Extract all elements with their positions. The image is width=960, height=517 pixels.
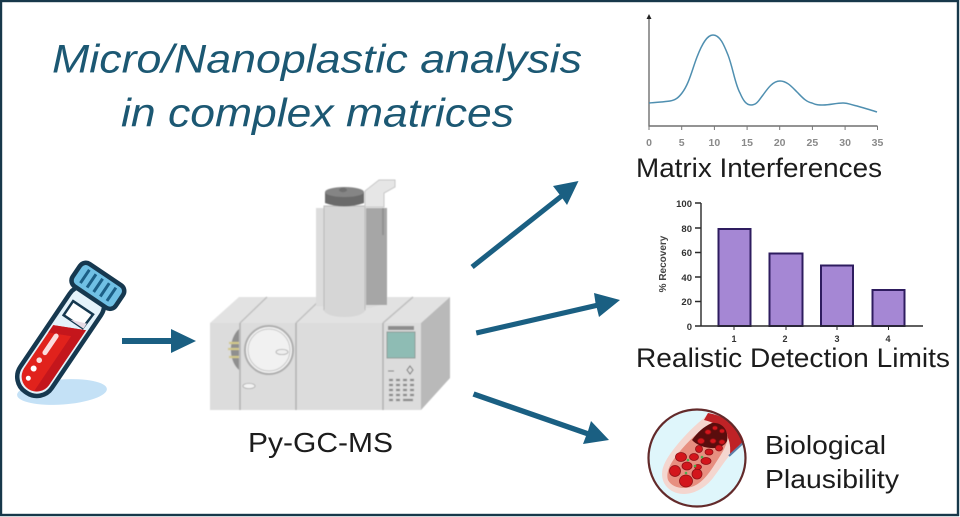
title: in complex matrices <box>121 92 514 136</box>
bar chart axes <box>695 203 923 326</box>
chart x tick labels: 5 <box>679 137 685 149</box>
label: Matrix Interferences: Matrix Interferences <box>636 153 882 183</box>
title <box>52 38 582 136</box>
icon: blood vessel <box>648 410 746 506</box>
label: Biological Plausibility: Biological <box>765 430 886 460</box>
chart x tick labels <box>646 137 883 149</box>
y axis title: % Recovery <box>658 235 669 292</box>
oven window <box>231 329 239 370</box>
y tick labels: 20 <box>681 297 692 308</box>
chart x tick labels: 35 <box>872 137 883 149</box>
chart x tick labels: 20 <box>774 137 786 149</box>
red blood cells <box>670 426 725 487</box>
instrument body top <box>210 297 450 323</box>
title: Micro/Nanoplastic analysis <box>52 38 582 82</box>
y tick labels: 60 <box>681 248 692 259</box>
y tick labels: 0 <box>687 322 692 333</box>
x tick labels: 2 <box>782 334 788 344</box>
vessel lumen <box>667 423 728 488</box>
autosampler arm <box>365 180 395 207</box>
label: Py-GC-MS: Py-GC-MS <box>248 427 393 458</box>
x tick labels: 1 <box>731 334 737 344</box>
vessel outer wall <box>704 413 744 454</box>
icon: Py-GC-MS instrument <box>210 180 450 410</box>
x tick labels: 3 <box>834 334 840 344</box>
arrow: sample to instrument <box>122 329 196 353</box>
arrow: to matrix interferences <box>470 181 578 269</box>
chart axes <box>649 17 878 126</box>
y tick labels: 40 <box>681 273 692 284</box>
icon: blood test tube <box>4 260 127 408</box>
arrow: to detection limits <box>476 293 620 336</box>
chart x tick labels: 30 <box>839 137 851 149</box>
chart x tick labels: 15 <box>741 137 753 149</box>
label: Biological Plausibility: Plausibility <box>765 464 899 494</box>
label: Realistic Detection Limits: Realistic Detection Limits <box>636 343 950 373</box>
control panel <box>387 332 415 358</box>
column housing <box>316 208 387 308</box>
instrument right side <box>421 297 450 410</box>
x tick labels <box>731 334 891 344</box>
chart: matrix interferences line chart <box>646 14 883 149</box>
chart: % recovery bar chart <box>658 199 923 344</box>
column cap <box>325 192 364 206</box>
y tick labels <box>676 199 692 333</box>
y tick labels: 80 <box>681 224 692 235</box>
label: Biological Plausibility <box>765 430 899 494</box>
arrow: to biological plausibility <box>472 392 609 444</box>
y tick labels: 100 <box>676 199 692 210</box>
oven dial <box>245 326 293 374</box>
bars <box>718 229 904 326</box>
vessel wall <box>662 413 744 494</box>
x tick labels: 4 <box>885 334 891 344</box>
chart x tick labels: 25 <box>807 137 818 149</box>
instrument front <box>210 323 421 410</box>
chart curve <box>649 35 877 112</box>
green particles <box>685 456 703 474</box>
chart x tick labels: 10 <box>709 137 720 149</box>
chart x tick labels: 0 <box>646 137 652 149</box>
